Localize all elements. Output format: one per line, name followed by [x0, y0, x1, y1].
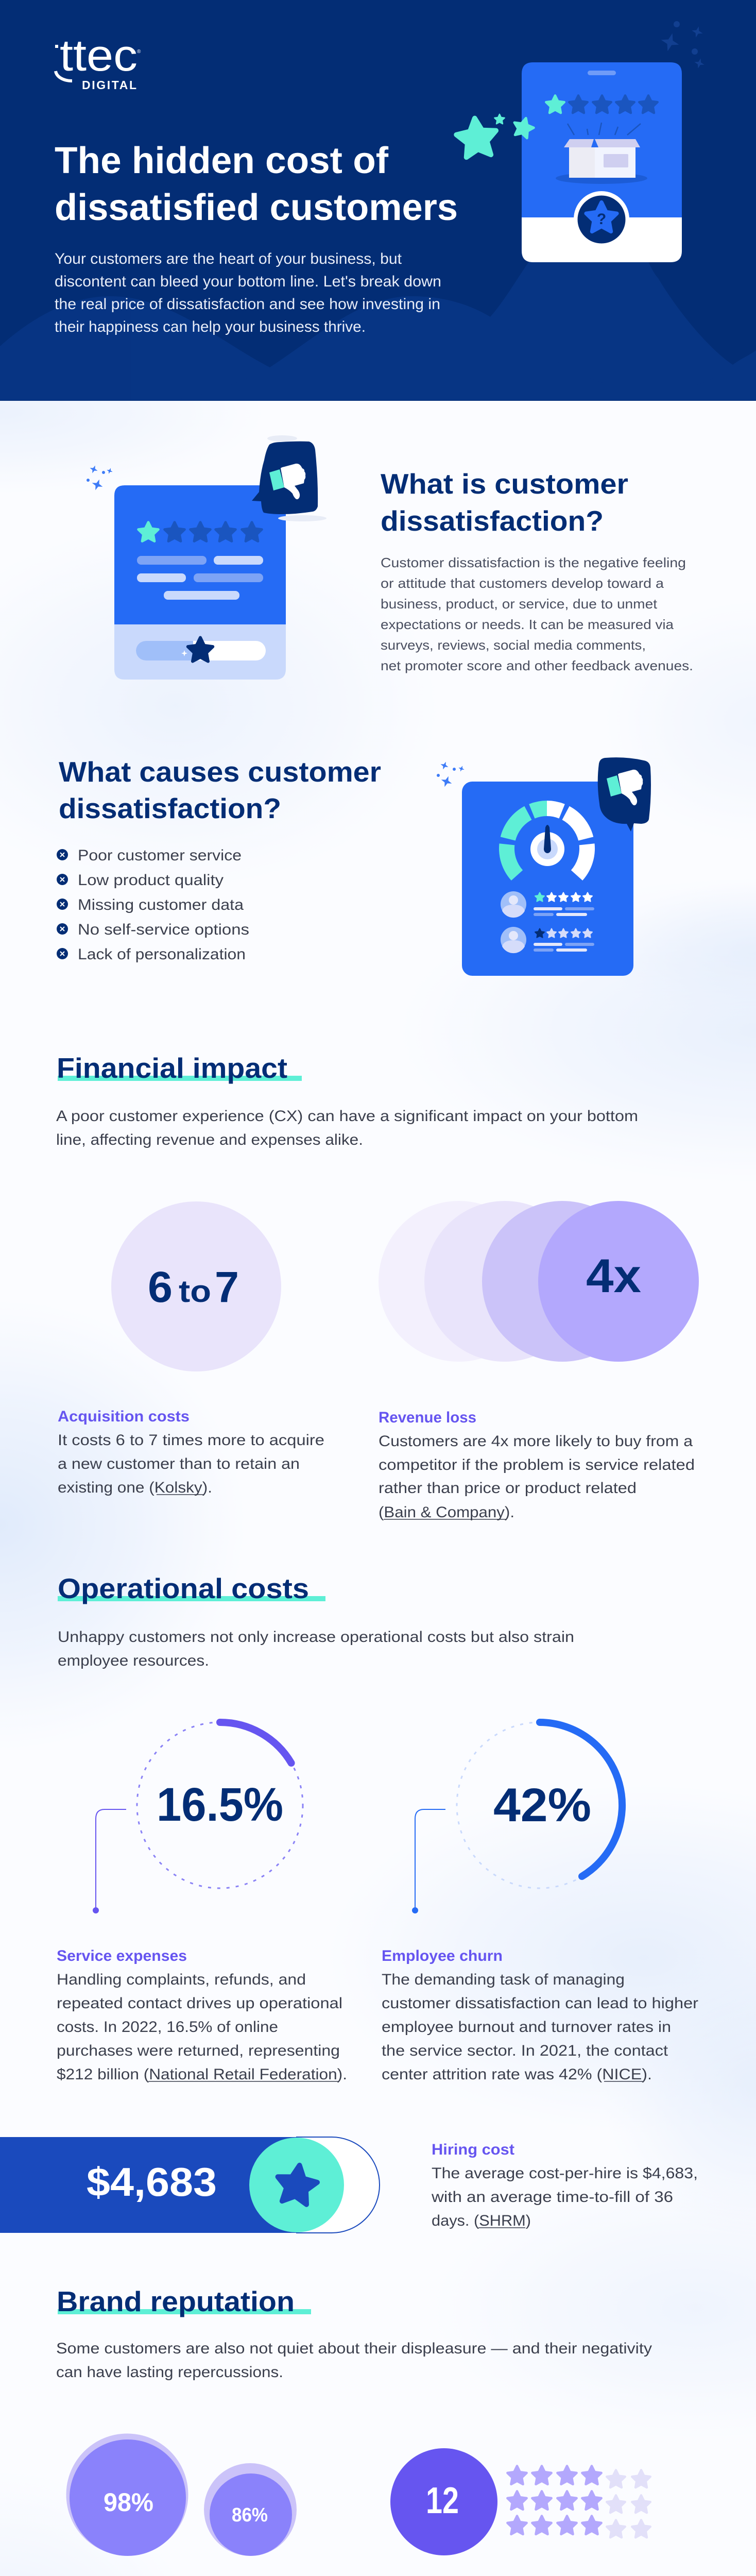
stat: 86% circle [204, 2463, 297, 2556]
icon: thumbs down bubble [598, 757, 651, 832]
text: service expenses: costs. In 2022, 16.5% of online [57, 2019, 278, 2036]
stat: 6 to 7 [111, 1201, 281, 1371]
logo: ttec digital: DIGITAL [82, 78, 136, 92]
text: brand intro: Some customers are also not quiet about their displeasure — and their negativity [56, 2340, 652, 2357]
text: employee churn: Employee churn [382, 1947, 503, 1964]
panel: hero [0, 0, 756, 401]
title [55, 140, 458, 228]
stat: 4x: 4x [586, 1250, 641, 1302]
icon: phone with review and box [522, 62, 682, 262]
title: The hidden cost of [55, 140, 389, 181]
text: acquisition costs: existing one (Kolsky). [58, 1479, 212, 1496]
hero waves [0, 206, 756, 400]
chart: 16.5% ring [93, 1722, 303, 1913]
text: brand intro: can have lasting repercussions. [56, 2364, 283, 2381]
text: revenue loss [379, 1409, 695, 1521]
text: revenue loss: rather than price or product related [379, 1480, 637, 1497]
list: causes: No self-service options [78, 921, 249, 938]
text: definition: Customer dissatisfaction is the negative feeling [381, 555, 686, 570]
text: service expenses: repeated contact drives up operational [57, 1995, 342, 2012]
text: acquisition costs: a new customer than to retain an [58, 1455, 300, 1472]
decorative sparkles: hero [659, 21, 706, 70]
intro text: Your customers are the heart of your business, but [55, 250, 402, 267]
stat: 98% circle: 98% [104, 2488, 153, 2517]
heading: what causes customer dissatisfaction [59, 756, 381, 824]
text: service expenses: Service expenses [57, 1947, 187, 1964]
icon: satisfaction gauge card [437, 757, 651, 976]
sparkles [437, 760, 466, 789]
text: employee churn: center attrition rate was 42% (NICE). [382, 2066, 652, 2083]
stat: 98% circle [66, 2434, 188, 2556]
intro text [55, 250, 441, 335]
icon: review card [87, 435, 327, 680]
review rows [501, 891, 594, 953]
chart: 42% ring [412, 1722, 623, 1913]
text: hiring cost: days. (SHRM) [432, 2212, 531, 2229]
text: hiring cost: The average cost-per-hire is $4,683, [432, 2165, 698, 2182]
text: employee churn: customer dissatisfaction can lead to higher [382, 1995, 698, 2012]
text: employee churn: The demanding task of managing [382, 1971, 625, 1988]
text: operational intro [58, 1629, 574, 1669]
text: financial intro: line, affecting revenue and expenses alike. [56, 1131, 363, 1148]
heading: what is customer dissatisfaction [381, 468, 628, 537]
stat: 12 circle: 12 [426, 2480, 459, 2521]
text: revenue loss: (Bain & Company). [379, 1504, 514, 1521]
text: employee churn [382, 1947, 698, 2083]
list: causes [57, 847, 249, 963]
text: revenue loss: Revenue loss [379, 1409, 476, 1426]
text: financial intro: A poor customer experience (CX) can have a significant impact on your bottom [56, 1108, 638, 1125]
heading: what is customer dissatisfaction: dissatisfaction? [381, 505, 604, 537]
title: dissatisfied customers [55, 187, 458, 228]
chart: 16.5% ring: 16.5% [157, 1778, 283, 1831]
sparkles [87, 464, 114, 492]
text: revenue loss: competitor if the problem is service related [379, 1456, 695, 1473]
text: definition [381, 555, 693, 673]
text: operational intro: Unhappy customers not only increase operational costs but also strain [58, 1629, 574, 1646]
chart: 42% ring: 42% [493, 1779, 591, 1832]
text: hiring cost: with an average time-to-fill of 36 [431, 2189, 673, 2206]
list: causes: Lack of personalization [78, 946, 246, 963]
icon: phone with review and box: ? [597, 211, 606, 228]
text: definition: business, product, or service, due to unmet [381, 596, 658, 612]
icon: thumbs down bubble [252, 442, 318, 514]
text: definition: expectations or needs. It can be measured via [381, 617, 674, 632]
text: employee churn: employee burnout and turnover rates in [382, 2019, 671, 2036]
logo: ttec digital: ttec [60, 31, 138, 80]
icon: star grid [507, 2466, 650, 2537]
heading: financial impact: Financial impact [57, 1052, 287, 1084]
text: definition: surveys, reviews, social media comments, [381, 637, 646, 653]
list: causes: Poor customer service [78, 847, 242, 864]
text: operational intro: employee resources. [58, 1652, 209, 1669]
heading: what causes customer dissatisfaction: dissatisfaction? [59, 792, 281, 824]
text: service expenses: purchases were returned, representing [57, 2042, 340, 2059]
text: definition: or attitude that customers develop toward a [381, 575, 664, 591]
text: service expenses [57, 1947, 347, 2083]
text: acquisition costs: Acquisition costs [58, 1408, 190, 1425]
intro text: their happiness can help your business thrive. [55, 318, 366, 335]
text: brand intro [56, 2340, 652, 2381]
logo: ttec digital: ® [137, 49, 141, 55]
text: hiring cost: Hiring cost [432, 2141, 514, 2158]
text: service expenses: $212 billion (National Retail Federation). [57, 2066, 347, 2083]
heading: operational costs: Operational costs [58, 1572, 309, 1604]
text: service expenses: Handling complaints, refunds, and [57, 1971, 306, 1988]
stat: 6 to 7: 6 [148, 1263, 173, 1311]
stat: hiring cost bar [0, 2137, 380, 2233]
stat: 86% circle: 86% [232, 2504, 268, 2526]
gauge [507, 808, 587, 875]
stat: 6 to 7: to [179, 1274, 211, 1309]
text: hiring cost [431, 2141, 698, 2229]
text: employee churn: the service sector. In 2021, the contact [382, 2042, 668, 2059]
intro text: the real price of dissatisfaction and see how investing in [55, 296, 440, 313]
text: acquisition costs: It costs 6 to 7 times more to acquire [58, 1432, 324, 1449]
stat: 4x [379, 1201, 699, 1362]
heading: what causes customer dissatisfaction: What causes customer [59, 756, 381, 788]
text: acquisition costs [58, 1408, 324, 1496]
text: definition: net promoter score and other feedback avenues. [381, 658, 693, 673]
intro text: discontent can bleed your bottom line. Let's break down [55, 273, 441, 290]
stat: 6 to 7: 7 [215, 1263, 239, 1311]
stat: hiring cost bar: $4,683 [87, 2159, 217, 2205]
logo: ttec digital [55, 31, 141, 92]
stat: 12 circle [390, 2448, 497, 2555]
icon: teal stars [455, 114, 536, 158]
list: causes: Low product quality [78, 872, 224, 889]
heading: brand reputation: Brand reputation [57, 2285, 295, 2317]
text: revenue loss: Customers are 4x more likely to buy from a [379, 1433, 693, 1450]
heading: what is customer dissatisfaction: What is customer [381, 468, 628, 500]
list: causes: Missing customer data [78, 896, 244, 913]
text: financial intro [56, 1108, 638, 1148]
